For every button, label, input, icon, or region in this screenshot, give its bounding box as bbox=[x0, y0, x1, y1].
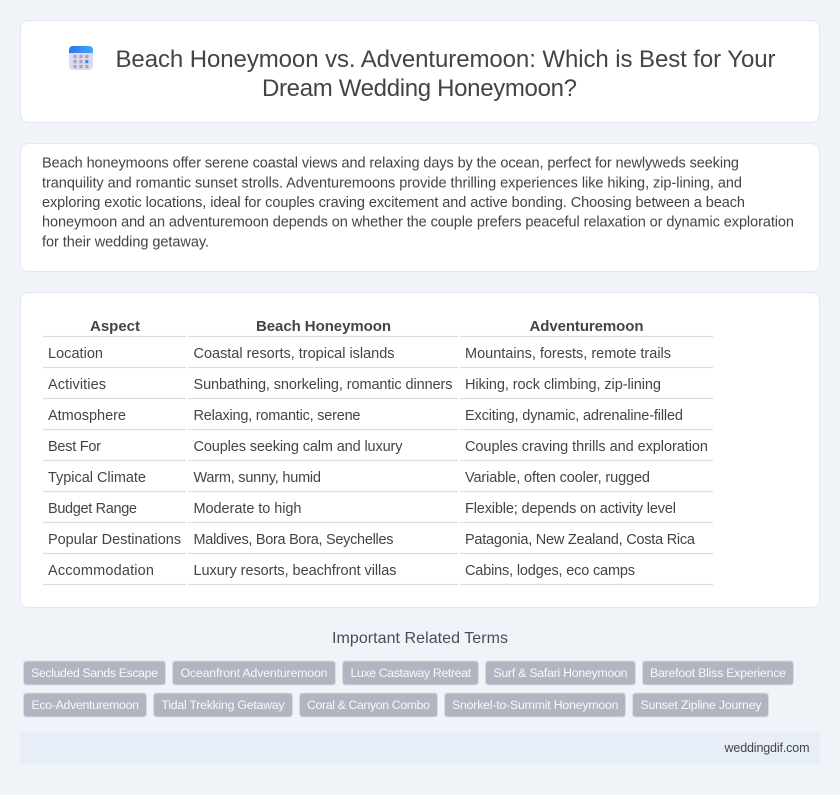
table row: atmosphere bbox=[43, 408, 713, 430]
tag: Oceanfront Adventuremoon bbox=[180, 666, 328, 680]
table row: typical climate bbox=[43, 470, 713, 492]
table row: budget range: Flexible; depends on activity level bbox=[465, 501, 676, 517]
table row: location: Mountains, forests, remote trails bbox=[465, 346, 671, 362]
tag bbox=[342, 661, 478, 685]
table row: budget range bbox=[43, 501, 713, 522]
table row: location bbox=[43, 346, 713, 368]
table row: accommodation: Accommodation bbox=[48, 563, 154, 579]
table row: accommodation: Cabins, lodges, eco camps bbox=[465, 563, 635, 579]
table row: typical climate: Warm, sunny, humid bbox=[194, 470, 321, 486]
tag: Snorkel-to-Summit Honeymoon bbox=[452, 698, 619, 712]
table row: activities: Hiking, rock climbing, zip-lining bbox=[465, 377, 661, 393]
table row: best for: Best For bbox=[48, 439, 101, 455]
tag: Tidal Trekking Getaway bbox=[162, 698, 285, 712]
tag: Sunset Zipline Journey bbox=[640, 698, 762, 712]
table row: budget range: Budget Range bbox=[48, 501, 137, 517]
table row: best for: Couples craving thrills and exploration bbox=[465, 439, 708, 455]
title bbox=[116, 46, 776, 102]
table row: popular destinations: Patagonia, New Zealand, Costa Rica bbox=[465, 532, 696, 548]
table row: best for bbox=[43, 439, 713, 460]
table row: atmosphere: Relaxing, romantic, serene bbox=[194, 408, 360, 424]
text block: introduction paragraph: for their wedding getaway. bbox=[42, 234, 209, 250]
title: Dream Wedding Honeymoon? bbox=[262, 75, 577, 102]
footer source text: weddingdif.com bbox=[724, 741, 810, 755]
tag: Luxe Castaway Retreat bbox=[350, 666, 472, 680]
tag bbox=[642, 661, 794, 685]
table row: location: Location bbox=[48, 346, 103, 362]
table row: activities bbox=[43, 377, 713, 398]
table row: atmosphere: Exciting, dynamic, adrenaline-filled bbox=[465, 408, 683, 424]
tag bbox=[300, 693, 438, 717]
table row: activities: Activities bbox=[48, 377, 106, 393]
text block: introduction paragraph: Beach honeymoons offer serene coastal views and relaxing days by the ocean, perfect for newlyweds seeking bbox=[42, 156, 739, 172]
panel: comparison table bbox=[20, 292, 820, 608]
tag bbox=[632, 693, 768, 717]
table row: popular destinations bbox=[43, 532, 713, 554]
tag bbox=[24, 693, 146, 717]
table header row: Adventuremoon bbox=[530, 318, 644, 335]
table header row: Beach Honeymoon bbox=[256, 318, 391, 335]
text block: introduction paragraph: honeymoon and an adventuremoon depends on whether the couple prefers peaceful relaxation or dynamic exploration bbox=[42, 214, 794, 230]
tag bbox=[24, 661, 166, 685]
tag bbox=[486, 661, 636, 685]
tag: Coral & Canyon Combo bbox=[307, 698, 430, 712]
tag bbox=[154, 693, 292, 717]
tag: Secluded Sands Escape bbox=[31, 666, 158, 680]
tag list: related terms bbox=[24, 661, 794, 717]
table header row bbox=[43, 318, 713, 336]
table row: location: Coastal resorts, tropical islands bbox=[194, 346, 394, 362]
table row: budget range: Moderate to high bbox=[194, 501, 302, 517]
table row: popular destinations: Maldives, Bora Bora, Seychelles bbox=[194, 532, 394, 548]
title: Beach Honeymoon vs. Adventuremoon: Which is Best for Your bbox=[116, 46, 776, 73]
table row: typical climate: Typical Climate bbox=[48, 470, 146, 486]
table row: atmosphere: Atmosphere bbox=[48, 408, 126, 424]
heading: important related terms: Important Related Terms bbox=[332, 630, 508, 647]
tag bbox=[444, 693, 626, 717]
text block: introduction paragraph: tranquility and romantic sunset strolls. Adventuremoons provide thrilling experiences like hiking, zip-lining, and bbox=[42, 176, 742, 192]
text block: introduction paragraph: exploring exotic locations, ideal for couples craving excitement and active bonding. Choosing between a beach bbox=[42, 195, 745, 211]
panel: introduction bbox=[20, 144, 820, 272]
tag bbox=[172, 661, 336, 685]
table row: popular destinations: Popular Destinations bbox=[48, 532, 181, 548]
tag: Surf & Safari Honeymoon bbox=[494, 666, 628, 680]
icon: calendar bbox=[69, 46, 93, 70]
table row: activities: Sunbathing, snorkeling, romantic dinners bbox=[194, 377, 452, 393]
tag: Barefoot Bliss Experience bbox=[650, 666, 786, 680]
table row: typical climate: Variable, often cooler, rugged bbox=[465, 470, 650, 486]
table row: accommodation bbox=[43, 563, 713, 584]
table row: accommodation: Luxury resorts, beachfront villas bbox=[194, 563, 396, 579]
tag: Eco-Adventuremoon bbox=[32, 698, 139, 712]
table header row: Aspect bbox=[90, 318, 140, 335]
footer bar bbox=[20, 731, 820, 765]
text block: introduction paragraph bbox=[42, 156, 794, 250]
panel: title header bbox=[20, 20, 820, 122]
table row: best for: Couples seeking calm and luxury bbox=[194, 439, 403, 455]
